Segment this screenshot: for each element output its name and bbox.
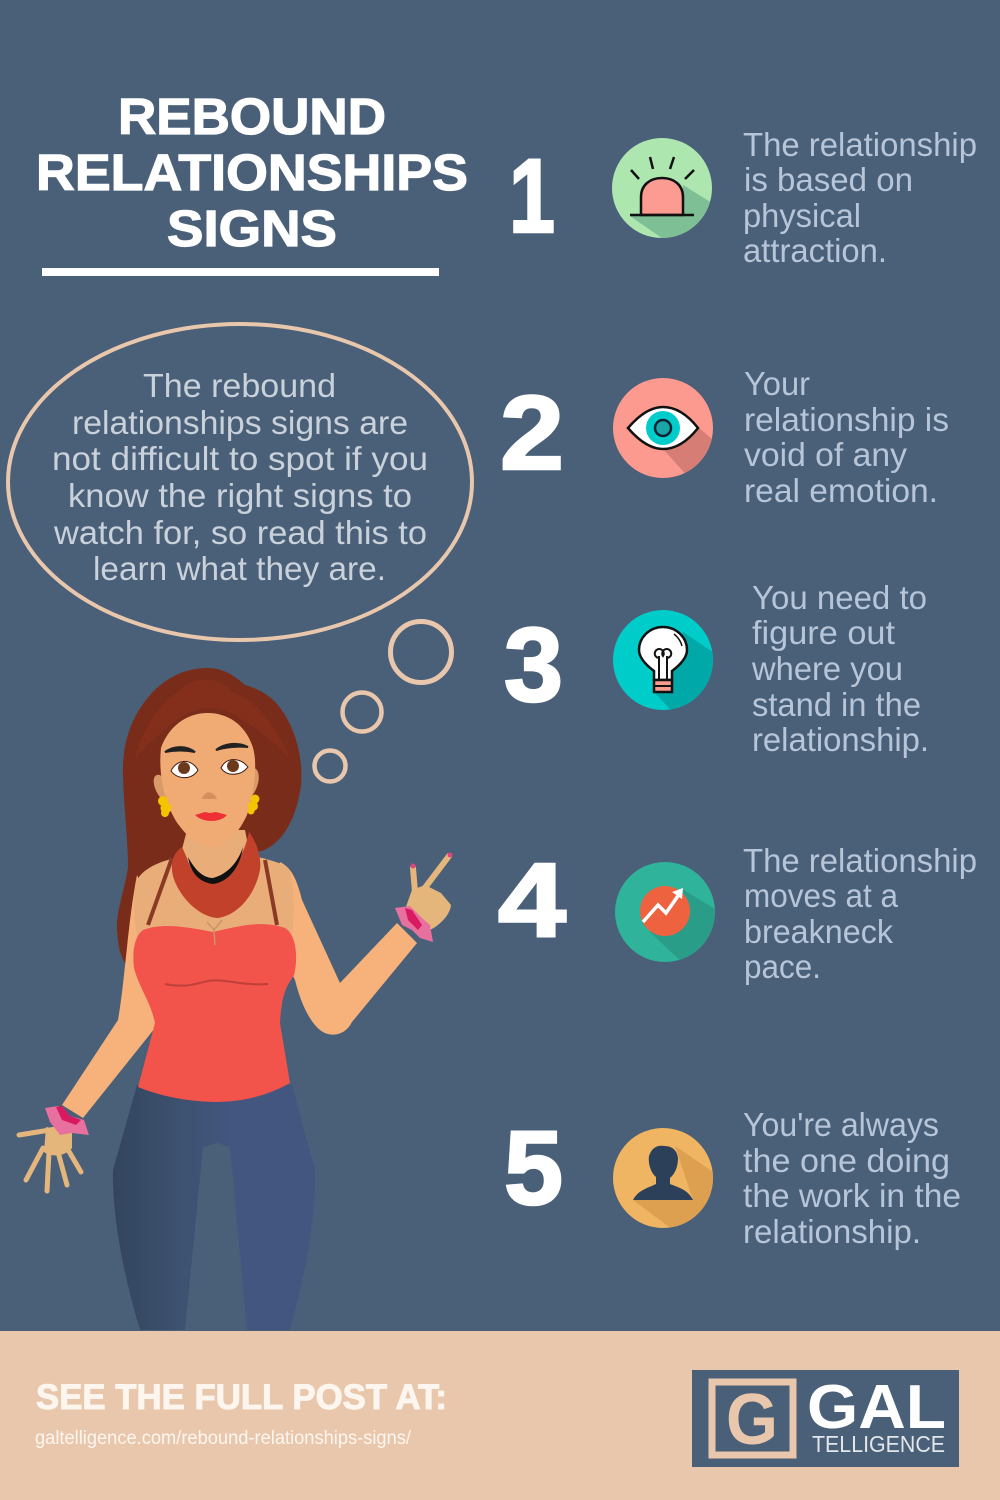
text: the one doing: [743, 1142, 950, 1179]
necklace: [207, 920, 222, 945]
speech bubble: watch for, so read this to: [53, 514, 427, 551]
thought bubbles: [314, 622, 452, 782]
speech bubble: [8, 324, 472, 640]
jeans: [113, 1085, 315, 1330]
lips: [195, 812, 227, 821]
text: relationship.: [752, 721, 929, 758]
earrings: [158, 794, 260, 817]
speech bubble: relationships signs are: [72, 404, 408, 441]
face: [160, 713, 255, 847]
right scrunchie: [395, 906, 433, 942]
top straps: [148, 858, 277, 925]
sign 5: [504, 1106, 961, 1250]
right arm: [270, 862, 417, 1035]
footer: [0, 1331, 1000, 1500]
title: [36, 88, 468, 257]
logo: GAL: [807, 1373, 946, 1442]
text: figure out: [752, 614, 895, 651]
icon: growth chart: [615, 862, 715, 962]
title underline: [42, 268, 439, 276]
text: The relationship: [743, 842, 977, 879]
text: [743, 842, 977, 985]
left hand: [19, 1127, 81, 1191]
footer heading: SEE THE FULL POST AT:: [36, 1378, 447, 1417]
icon: light bulb: [613, 610, 713, 710]
text: Your: [744, 365, 810, 402]
title: RELATIONSHIPS: [36, 144, 468, 201]
logo: TELLIGENCE: [812, 1431, 945, 1457]
ears: [154, 768, 259, 802]
number 4: 4: [498, 842, 566, 959]
sign 3: [504, 579, 929, 758]
sign 2: [502, 372, 948, 502]
woman illustration: [19, 668, 452, 1330]
text: [743, 1106, 961, 1250]
text: real emotion.: [744, 472, 938, 509]
scarf: [172, 832, 260, 918]
text: moves at a: [744, 877, 899, 914]
speech bubble: know the right signs to: [68, 477, 412, 514]
title: REBOUND: [118, 88, 386, 145]
speech bubble: learn what they are.: [93, 550, 386, 587]
text: [743, 126, 977, 269]
text: stand in the: [752, 686, 921, 723]
sign 4: [498, 842, 977, 985]
title: SIGNS: [167, 200, 337, 257]
number 1: 1: [509, 138, 555, 255]
red top: [133, 924, 296, 1102]
text: [744, 365, 949, 509]
hair: [117, 668, 301, 963]
neck and chest: [134, 830, 294, 945]
nose: [202, 792, 217, 799]
text: is based on: [744, 161, 913, 198]
text: attraction.: [743, 232, 887, 269]
text: physical: [743, 197, 861, 234]
text: void of any: [744, 436, 908, 473]
speech bubble: not difficult to spot if you: [52, 440, 428, 477]
scarf shadow: [188, 847, 243, 884]
right hand: [403, 852, 452, 930]
eyebrows: [165, 744, 248, 752]
text: The relationship: [743, 126, 977, 163]
text: where you: [751, 650, 903, 687]
number 2: 2: [500, 375, 564, 492]
text: [751, 579, 929, 758]
logo: G: [726, 1380, 778, 1460]
text: relationship.: [743, 1213, 921, 1250]
icon: person: [613, 1128, 713, 1228]
sign 1: [509, 126, 977, 269]
text: breakneck: [744, 913, 893, 950]
number 3: 3: [504, 607, 563, 724]
eyes: [171, 760, 248, 778]
speech bubble: The rebound: [143, 367, 336, 404]
left scrunchie: [45, 1106, 89, 1135]
text: You need to: [752, 579, 927, 616]
text: pace.: [744, 948, 821, 985]
logo: [692, 1370, 959, 1467]
icon: eye: [613, 378, 713, 478]
text: the work in the: [743, 1177, 961, 1214]
number 5: 5: [504, 1110, 563, 1227]
icon: siren: [612, 138, 712, 238]
footer url: galtelligence.com/rebound-relationships-signs/: [35, 1428, 412, 1449]
text: relationship is: [744, 401, 949, 438]
left arm: [62, 875, 165, 1118]
text: You're always: [743, 1106, 939, 1143]
